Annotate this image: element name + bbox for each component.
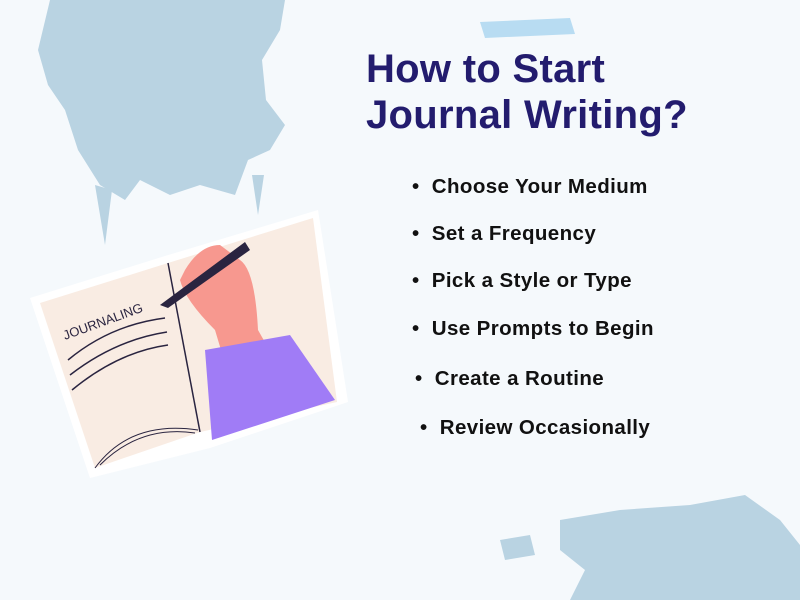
text: • Use Prompts to Begin bbox=[412, 317, 654, 340]
title: Journal Writing? bbox=[366, 93, 688, 137]
title bbox=[366, 47, 688, 137]
list of steps bbox=[412, 175, 654, 439]
text: • Create a Routine bbox=[415, 367, 604, 390]
text: • Set a Frequency bbox=[412, 222, 596, 245]
text: • Pick a Style or Type bbox=[412, 269, 632, 292]
illustration: journal and hand: JOURNALING bbox=[61, 300, 145, 343]
text: • Choose Your Medium bbox=[412, 175, 648, 198]
text: • Review Occasionally bbox=[420, 416, 650, 439]
title: How to Start bbox=[366, 47, 605, 91]
